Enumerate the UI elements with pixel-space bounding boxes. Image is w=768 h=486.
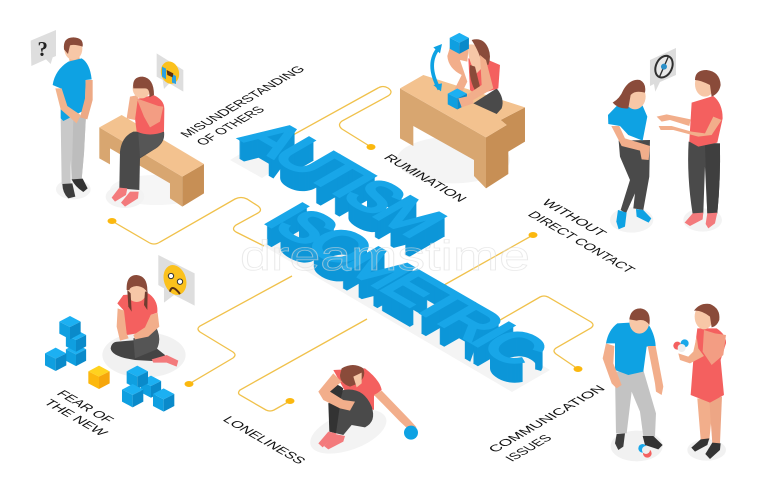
block on desk bbox=[448, 88, 467, 109]
scene: fear of the new bbox=[45, 255, 195, 412]
connector: misunderstanding bbox=[108, 198, 264, 246]
title: ISOMETRIC: ISOMETRIC bbox=[251, 194, 558, 372]
arrow: cycle bbox=[432, 44, 442, 91]
dropped circles bbox=[638, 444, 652, 458]
woman in blue bbox=[608, 80, 653, 233]
connector: loneliness bbox=[238, 319, 367, 411]
man looking down bbox=[603, 308, 663, 461]
connector: rumination bbox=[293, 86, 391, 150]
woman in red bbox=[657, 70, 723, 232]
connector: without direct contact bbox=[437, 232, 538, 289]
speech bubble: question mark bbox=[31, 30, 56, 66]
woman sitting on bench bbox=[106, 77, 164, 208]
woman feet under desk bbox=[456, 137, 477, 158]
connector: communication issues bbox=[495, 296, 593, 372]
labels: COMMUNICATION bbox=[485, 383, 608, 455]
labels: ISSUES bbox=[502, 432, 556, 464]
watermark: dreamstime bbox=[240, 232, 530, 279]
crouching woman bbox=[318, 365, 417, 449]
labels: OF OTHERS bbox=[193, 104, 268, 148]
speech bubble: frightened emoji bbox=[158, 255, 195, 306]
desk bbox=[400, 75, 525, 188]
speech bubble: question mark: ? bbox=[38, 39, 48, 61]
scene: communication issues bbox=[603, 304, 726, 461]
block in hand bbox=[450, 33, 469, 54]
labels: RUMINATION bbox=[380, 152, 470, 204]
connector: fear of the new bbox=[184, 276, 292, 387]
speech bubble: no eye contact bbox=[650, 48, 676, 92]
labels: LONELINESS bbox=[219, 414, 310, 466]
hand on block bbox=[458, 95, 473, 107]
labels bbox=[40, 63, 639, 466]
labels: MISUNDERSTANDING bbox=[177, 63, 308, 140]
scene: misunderstanding of others bbox=[31, 30, 204, 208]
labels: DIRECT CONTACT bbox=[524, 209, 639, 275]
woman in red dress bbox=[673, 304, 726, 461]
bench bbox=[99, 115, 204, 207]
blocks: left stack bbox=[45, 316, 86, 371]
labels: WITHOUT bbox=[538, 197, 610, 239]
title: AUTISM: AUTISM bbox=[228, 112, 456, 243]
woman bbox=[447, 39, 503, 114]
scene: without direct contact bbox=[608, 48, 723, 233]
blocks: right stack bbox=[122, 366, 174, 412]
ground shadow: title bbox=[230, 145, 550, 392]
block: yellow bbox=[88, 366, 110, 389]
woman sitting on floor bbox=[102, 275, 186, 378]
scene: rumination bbox=[397, 33, 525, 188]
labels: FEAR OF bbox=[53, 388, 118, 425]
man standing bbox=[53, 37, 93, 199]
scene: loneliness bbox=[304, 365, 418, 463]
speech bubble: crying emoji bbox=[157, 53, 183, 92]
labels: THE NEW bbox=[40, 397, 112, 438]
ball bbox=[404, 426, 418, 440]
